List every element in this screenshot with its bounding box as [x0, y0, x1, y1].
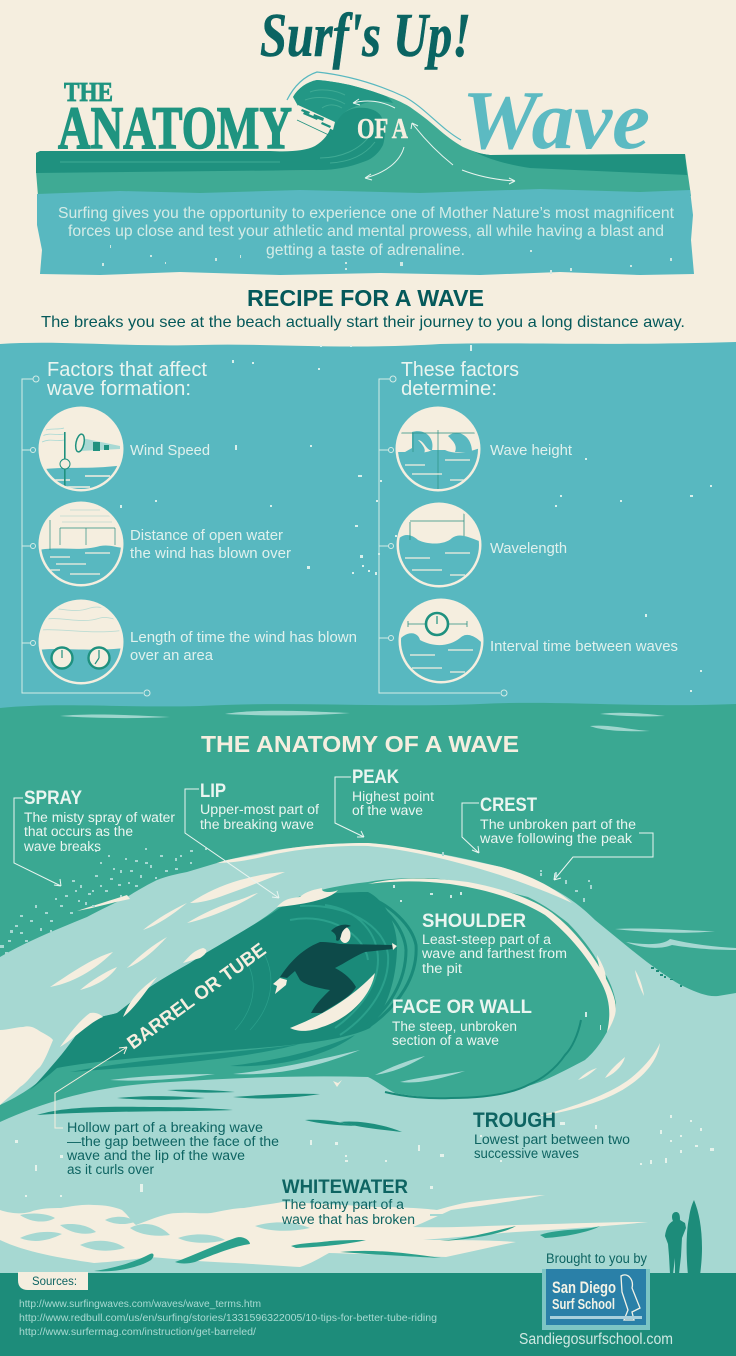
- callout: trough: [473, 1109, 630, 1161]
- callout: peak: of the wave: [352, 803, 423, 818]
- panel: footer: [0, 1251, 736, 1356]
- callout: crest: CREST: [480, 794, 537, 816]
- bracket: results: [379, 376, 507, 696]
- title: Surf's Up: Surf's Up!: [260, 2, 471, 70]
- callout: spray: wave breaks: [23, 839, 101, 854]
- text: distance: [130, 528, 291, 562]
- logo: San Diego Surf School: San Diego: [552, 1278, 616, 1297]
- source links: http://www.redbull.com/us/en/surfing/stories/1331596322005/10-tips-for-better-tube-riding: [19, 1313, 437, 1324]
- heading: factors: wave formation:: [46, 378, 191, 400]
- spray specks: [0, 848, 207, 972]
- icon: wavelength: [396, 502, 482, 590]
- heading: determine: [401, 359, 519, 400]
- callout: lip: LIP: [200, 780, 226, 802]
- heading: anatomy: THE ANATOMY OF A WAVE: [201, 731, 519, 757]
- source links: http://www.surfingwaves.com/waves/wave_terms.htm: [19, 1299, 261, 1310]
- text: website: Sandiegosurfschool.com: [519, 1331, 673, 1348]
- intro panel: [37, 189, 694, 275]
- text: length of time: Length of time the wind has blown: [130, 630, 357, 646]
- callout: peak: [335, 766, 434, 837]
- callout: lip: [185, 780, 319, 898]
- wave face: [0, 878, 616, 1122]
- teal specks on pale: [651, 967, 682, 987]
- callout: trough: Lowest part between two: [474, 1132, 630, 1147]
- callout: whitewater: WHITEWATER: [282, 1176, 408, 1198]
- callout: crest: The unbroken part of the: [480, 817, 636, 832]
- crest specks: [442, 852, 592, 902]
- callout: shoulder: [421, 910, 567, 976]
- callout: spray: SPRAY: [24, 787, 82, 809]
- text: OF A: OF A: [357, 113, 408, 145]
- foam teal streaks: [94, 1226, 600, 1271]
- text: wave height: Wave height: [490, 443, 572, 459]
- callout: lip: the breaking wave: [200, 817, 314, 832]
- callout: shoulder: the pit: [422, 961, 462, 976]
- text: barrel description: —the gap between the face of the: [67, 1134, 279, 1149]
- heading: determine: determine:: [401, 378, 497, 400]
- surfer: [273, 925, 397, 1031]
- text: wind speed: Wind Speed: [130, 443, 210, 459]
- title: THE: THE: [64, 77, 113, 107]
- heading: determine: These factors: [401, 359, 519, 381]
- heading: factors: [46, 359, 207, 400]
- heading: factors: Factors that affect: [47, 359, 207, 381]
- heading: recipe for a wave: RECIPE FOR A WAVE: [247, 285, 484, 311]
- leader: barrel: [55, 1047, 127, 1128]
- tab: sources: [18, 1272, 88, 1290]
- intro text: [58, 205, 675, 259]
- callout: whitewater: [281, 1176, 415, 1227]
- text: length of time: [130, 630, 357, 664]
- callout: whitewater: wave that has broken: [281, 1212, 415, 1227]
- barrel: [30, 892, 397, 1090]
- text: brought to you by: Brought to you by: [546, 1251, 647, 1266]
- text: distance: the wind has blown over: [130, 546, 291, 562]
- panel: recipe aqua section: [0, 342, 736, 720]
- text: barrel description: wave and the lip of the wave: [66, 1148, 245, 1163]
- foam pale patches: [20, 1214, 310, 1251]
- surfer silhouette: [665, 1200, 702, 1275]
- text: wavelength: Wavelength: [490, 541, 567, 557]
- callout: whitewater: The foamy part of a: [282, 1197, 405, 1212]
- logo: San Diego Surf School: [542, 1269, 650, 1330]
- wave body: [0, 843, 736, 1280]
- bracket: factors: [22, 376, 150, 696]
- callout: spray: that occurs as the: [24, 824, 133, 839]
- whitewater foam: [0, 1195, 648, 1271]
- icon: open water distance: [38, 502, 125, 590]
- intro text: getting a taste of adrenaline.: [266, 242, 465, 259]
- source links: http://www.surfermag.com/instruction/get-barreled/: [19, 1327, 256, 1338]
- icon: time: [38, 600, 125, 690]
- right rim arc: [385, 1020, 581, 1098]
- icon: wind speed: [38, 406, 125, 495]
- cream highlights: [0, 843, 660, 1117]
- text: barrel description: as it curls over: [67, 1162, 154, 1177]
- callout: face or wall: The steep, unbroken: [392, 1019, 517, 1034]
- streaks under barrel: [37, 1035, 402, 1132]
- text: length of time: over an area: [130, 648, 214, 664]
- text: interval: Interval time between waves: [490, 639, 678, 655]
- callout: trough: TROUGH: [473, 1109, 556, 1132]
- big wave illustration: [0, 843, 736, 1280]
- logo: San Diego Surf School: Surf School: [552, 1296, 615, 1313]
- tab: sources: Sources:: [32, 1274, 77, 1288]
- header panel: [36, 2, 694, 331]
- barrel rings: [350, 894, 416, 1030]
- callout: trough: successive waves: [474, 1146, 579, 1161]
- callout: face or wall: FACE OR WALL: [392, 996, 532, 1018]
- callout: shoulder: Least-steep part of a: [422, 932, 552, 947]
- callout: lip: Upper-most part of: [200, 802, 319, 817]
- header wave illustration: [36, 72, 691, 196]
- intro text: Surfing gives you the opportunity to experience one of Mother Nature’s most magnificent: [58, 205, 675, 222]
- text: distance: Distance of open water: [130, 528, 283, 544]
- callout: face or wall: [392, 996, 532, 1048]
- intro text: forces up close and test your athletic and mental prowess, all while having a blast and: [68, 223, 664, 240]
- icon: interval time: [398, 598, 484, 686]
- title: ANATOMY: ANATOMY: [58, 95, 292, 161]
- text: barrel description: [66, 1120, 279, 1177]
- panel: lower text on pale water: [0, 1047, 714, 1275]
- subheading: The breaks you see at the beach actually start their journey to you a long distance away.: [41, 314, 685, 331]
- callout: crest: wave following the peak: [479, 831, 632, 846]
- callout: spray: The misty spray of water: [24, 810, 176, 825]
- title: Wave: Wave: [462, 74, 650, 167]
- icon: wave height: [396, 406, 480, 492]
- callout: peak: Highest point: [352, 789, 434, 804]
- callout: shoulder: wave and farthest from: [421, 946, 567, 961]
- callout: crest: [462, 794, 653, 880]
- callout: peak: PEAK: [352, 766, 399, 788]
- pale water specks: [15, 1115, 714, 1197]
- label: barrel or tube: BARREL OR TUBE: [124, 939, 270, 1054]
- foam pale lines: [430, 1214, 470, 1224]
- source links: [19, 1299, 437, 1338]
- text: barrel description: Hollow part of a breaking wave: [67, 1120, 263, 1135]
- face specks: [393, 885, 601, 1030]
- callout: spray: [14, 787, 176, 886]
- panel: anatomy section: [0, 703, 736, 1280]
- callout: face or wall: section of a wave: [392, 1033, 499, 1048]
- callout: shoulder: SHOULDER: [422, 910, 526, 932]
